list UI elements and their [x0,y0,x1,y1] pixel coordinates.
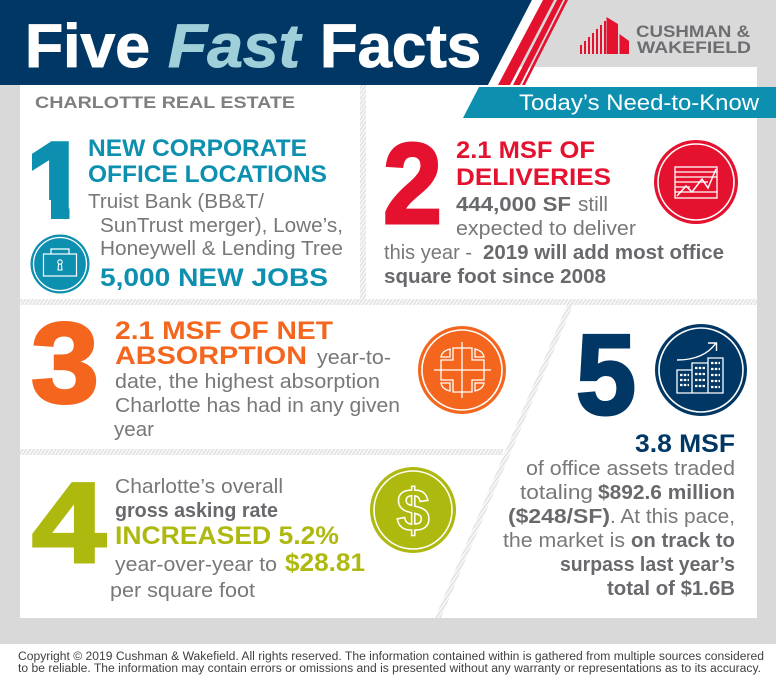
heading: new corporate office locations: OFFICE LOCATIONS [88,161,327,188]
body text: deliveries: 2019 will add most office [483,242,724,264]
body text: absorption: year [114,419,154,441]
heading: 2.1 MSF of net absorption: ABSORPTION [115,342,307,370]
body text: office assets: on track to [631,530,735,552]
body text: deliveries: this year - [384,242,472,264]
body text: office assets: the market is [503,530,625,552]
heading: new corporate office locations [88,135,327,188]
body text: companies: Truist Bank (BB&T/ [88,191,264,213]
panel: fact 3 [31,300,506,441]
heading: 3.8 MSF: 3.8 MSF [635,430,735,458]
body text: deliveries: still [578,194,608,216]
body text: deliveries: expected to deliver [456,218,636,240]
title: Five [25,12,150,80]
logo wordmark [636,22,751,57]
dividers [20,85,757,618]
number 3: 3 [31,300,99,427]
footer: copyright [18,651,764,675]
icon: dollar coin: $ [396,477,430,544]
title [25,12,481,80]
body text: deliveries: square foot since 2008 [384,266,606,288]
body text: companies: SunTrust merger), Lowe’s, [100,215,343,237]
panel: fact 2 [383,121,738,288]
icon: line chart [654,140,738,224]
heading: new corporate office locations: NEW CORPORATE [88,135,307,162]
panel: fact 4 [32,460,456,602]
callout: 5,000 new jobs: 5,000 NEW JOBS [100,264,328,292]
number 1: 1 [24,120,88,247]
icon: briefcase [30,234,90,294]
logo wordmark: CUSHMAN & [636,22,750,41]
body text: gross asking rate: gross asking rate [115,500,278,522]
icon: buildings with growth arrow [655,324,747,416]
body text: gross asking rate: per square foot [110,580,255,602]
callout: increased 5.2%: INCREASED 5.2% [115,522,339,550]
heading: 2.1 MSF of deliveries [456,137,611,191]
body text: office assets: totaling [520,482,593,504]
logo wordmark: WAKEFIELD [637,38,751,57]
body text: deliveries [384,194,724,288]
body text: absorption: year-to- [317,347,391,369]
logo: Cushman & Wakefield [580,17,751,57]
panel: fact 5 [503,312,747,600]
body text: office assets: ($248/SF) [508,506,610,528]
callout: $28.81: $28.81 [285,549,365,577]
panel: fact 1 [30,139,342,294]
body text: office assets: total of $1.6B [607,578,735,600]
white content panel [20,67,757,618]
heading: 2.1 MSF of net absorption [115,317,333,370]
heading: 2.1 MSF of deliveries: 2.1 MSF OF [456,137,595,164]
body text: companies [88,191,343,260]
header banner [0,0,568,85]
body text: office assets [503,458,735,600]
body text: absorption [114,347,400,441]
body text: deliveries: 444,000 SF [456,194,571,216]
heading: 2.1 MSF of deliveries: DELIVERIES [456,164,611,191]
title: Facts [320,12,481,80]
footer: copyright: to be reliable. The information may contain errors or omissions and is presented without any warranty or representations as to its accuracy. [18,663,761,675]
body text: gross asking rate [110,476,283,602]
number 4: 4 [32,460,106,587]
icon: crossroads [418,326,506,414]
banner: Today's Need-to-Know: Today’s Need-to-Know [519,90,759,115]
body text: gross asking rate: year-over-year to [115,554,277,576]
body text: office assets: of office assets traded [526,458,735,480]
body text: gross asking rate: Charlotte’s overall [115,476,283,498]
body text: absorption: date, the highest absorption [115,371,380,393]
title: Fast [168,12,303,80]
number 2: 2 [383,121,442,248]
body text: office assets: surpass last year’s [560,554,735,576]
footer: copyright: Copyright © 2019 Cushman & Wakefield. All rights reserved. The information contained within is gathered from multiple sources considered [18,651,764,663]
body text: office assets: . At this pace, [610,506,735,528]
body text: office assets: $892.6 million [598,482,735,504]
icon: dollar coin [370,467,456,553]
banner: Today's Need-to-Know [463,87,776,118]
subtitle: Charlotte Real Estate: CHARLOTTE REAL ESTATE [35,94,295,112]
body text: absorption: Charlotte has had in any given [115,395,400,417]
heading: 2.1 MSF of net absorption: 2.1 MSF OF NET [115,317,333,345]
body text: companies: Honeywell & Lending Tree [100,238,343,260]
icon: logo building [580,17,629,54]
number 5: 5 [576,312,636,439]
